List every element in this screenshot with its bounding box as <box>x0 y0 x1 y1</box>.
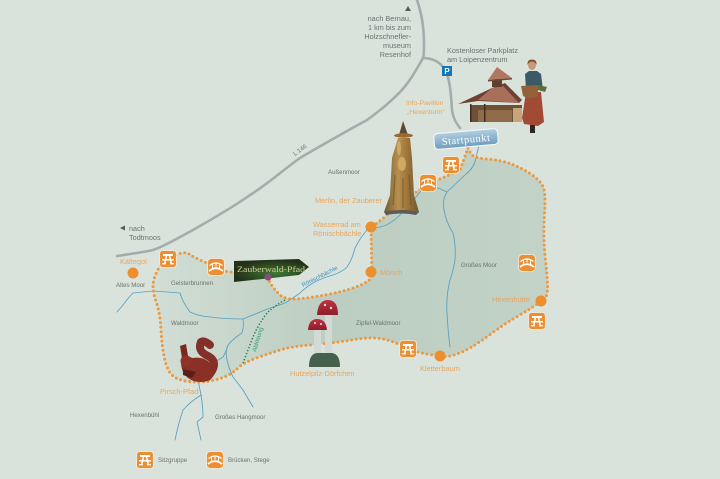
icon: parking: P <box>444 67 450 76</box>
label: Großes Hangmoor: Großes Hangmoor <box>215 414 265 421</box>
legend: bridges: Brücken, Stege <box>228 457 270 464</box>
start sign <box>433 128 499 150</box>
icon: seating, Hexenhütte <box>529 313 545 329</box>
rivers <box>117 145 479 440</box>
legend <box>137 452 270 468</box>
parking label: Kostenloser Parkplatz <box>447 46 518 55</box>
icon: bridge, Großes Moor <box>519 255 535 271</box>
label: Todtmoos <box>120 224 161 242</box>
alternate route: Ablösung: Ablösung <box>252 327 265 353</box>
label: Wasserrad: Wasserrad am <box>313 220 361 229</box>
label: Geisterbrunnen: Geisterbrunnen <box>171 280 213 287</box>
legend: seating: Sitzgruppe <box>158 457 188 464</box>
label: Kältegol: Kältegol <box>120 257 147 266</box>
label: Rönischbächle: Rönischbächle <box>301 265 340 289</box>
icon: seating, Geisterbrunnen <box>160 251 176 267</box>
illustration: Zauberwald sign <box>234 259 309 282</box>
label: Großes Moor: Großes Moor <box>461 262 497 269</box>
illustration: Merlin figure <box>384 121 419 215</box>
direction label: Bernau: museum <box>383 41 411 50</box>
icon: bridge, Merlin <box>420 175 436 191</box>
illustration: mushrooms <box>308 300 340 367</box>
label: Hutzelpilz: Hutzelpilz-Dörfchen <box>290 369 354 378</box>
illustration: pavilion <box>458 67 522 122</box>
label: Pirsch-Pfad: Pirsch-Pfad <box>160 387 198 396</box>
alternate route: Ablösung <box>243 300 285 363</box>
illustration: woman <box>521 60 547 133</box>
label: Hexenbühl: Hexenbühl <box>130 412 159 419</box>
illustration: squirrel <box>180 341 214 382</box>
hiking area <box>153 148 548 382</box>
station markers <box>128 222 546 362</box>
label: road number: L 146 <box>292 143 309 158</box>
label: Hexenhütte: Hexenhütte <box>492 295 530 304</box>
label: Todtmoos: Todtmoos <box>129 233 161 242</box>
trail <box>153 148 548 382</box>
direction label: Bernau: nach Bernau, <box>368 14 411 23</box>
direction label: Bernau: Holzschnefler- <box>364 32 412 41</box>
label: Wasserrad: Rönischbächle <box>313 229 361 238</box>
label: Info-Pavillon: Info-Pavillon <box>406 100 444 107</box>
icon: parking <box>442 66 452 76</box>
label: Info-Pavillon: „Hexenturm“ <box>407 109 446 116</box>
label: Altes Moor: Altes Moor <box>116 282 145 289</box>
label: Zipfel-Waldmoor: Zipfel-Waldmoor <box>356 320 400 327</box>
direction label: Bernau: 1 km bis zum <box>368 23 411 32</box>
icon: seating, Kletterbaum <box>400 341 416 357</box>
label: Waldmoor: Waldmoor <box>171 320 199 327</box>
roads <box>117 0 460 256</box>
label: Außenmoor: Außenmoor <box>328 169 360 176</box>
illustration: Zauberwald sign: Zauberwald-Pfad <box>237 264 306 274</box>
label: Todtmoos: nach <box>129 224 145 233</box>
direction label: Bernau <box>364 6 412 59</box>
start sign: Startpunkt <box>441 133 491 148</box>
parking label: am Loipenzentrum <box>447 55 507 64</box>
direction label: Bernau: Resenhof <box>380 50 412 59</box>
icon: seating, Startpunkt <box>443 157 459 173</box>
label: Merlin: Merlin, der Zauberer <box>315 196 382 205</box>
label: Kletterbaum: Kletterbaum <box>420 364 460 373</box>
icon: bridge, Zauberwald <box>208 259 224 275</box>
label: Mönch: Mönch <box>380 268 402 277</box>
